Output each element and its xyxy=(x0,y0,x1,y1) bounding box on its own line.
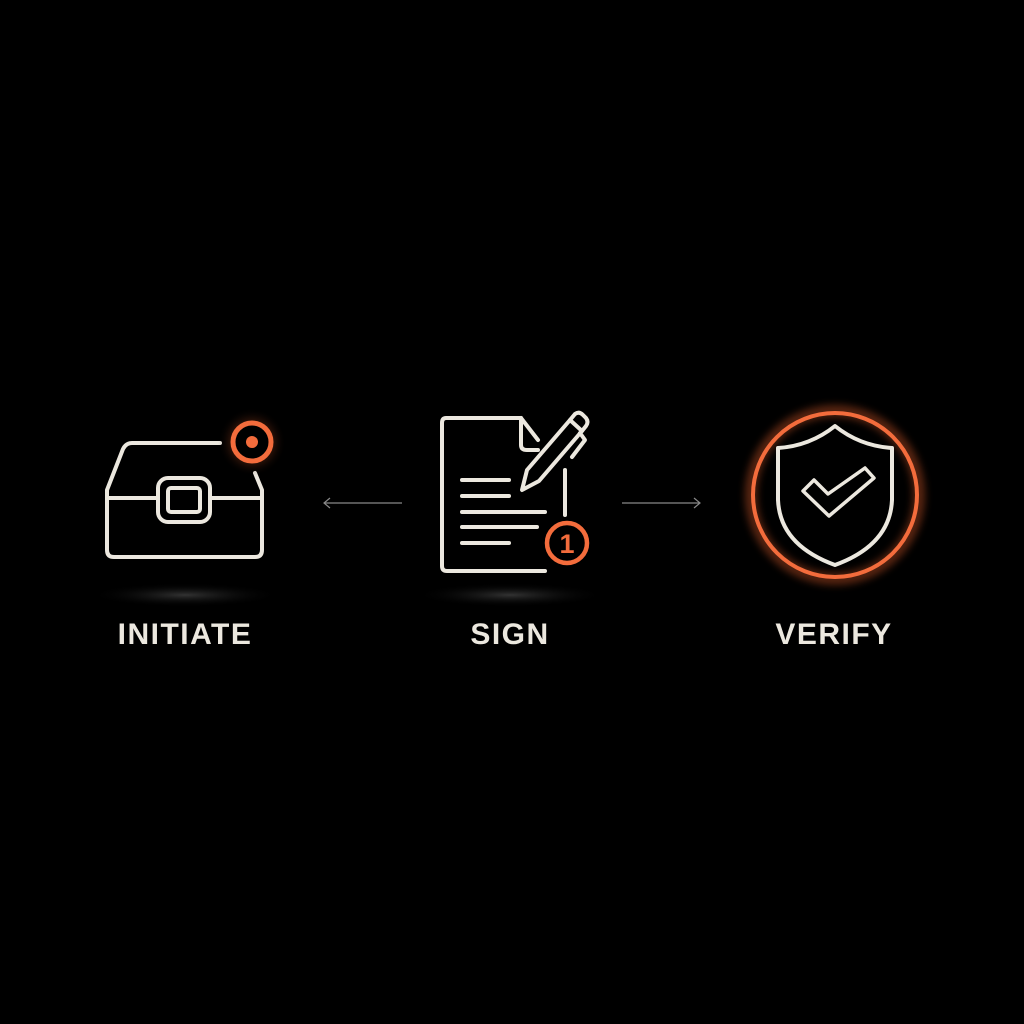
arrow: right xyxy=(622,498,700,508)
floor shadows xyxy=(90,583,605,607)
icon: shield (verify) xyxy=(751,411,919,579)
label: initiate: INITIATE xyxy=(118,618,252,651)
icon: document with pen (sign): 1 xyxy=(559,529,575,559)
icon: chest (initiate) xyxy=(107,408,286,557)
arrow: left xyxy=(324,498,402,508)
label: verify: VERIFY xyxy=(775,618,893,651)
icon: document with pen (sign) xyxy=(442,413,588,571)
label: sign: SIGN xyxy=(470,618,550,651)
